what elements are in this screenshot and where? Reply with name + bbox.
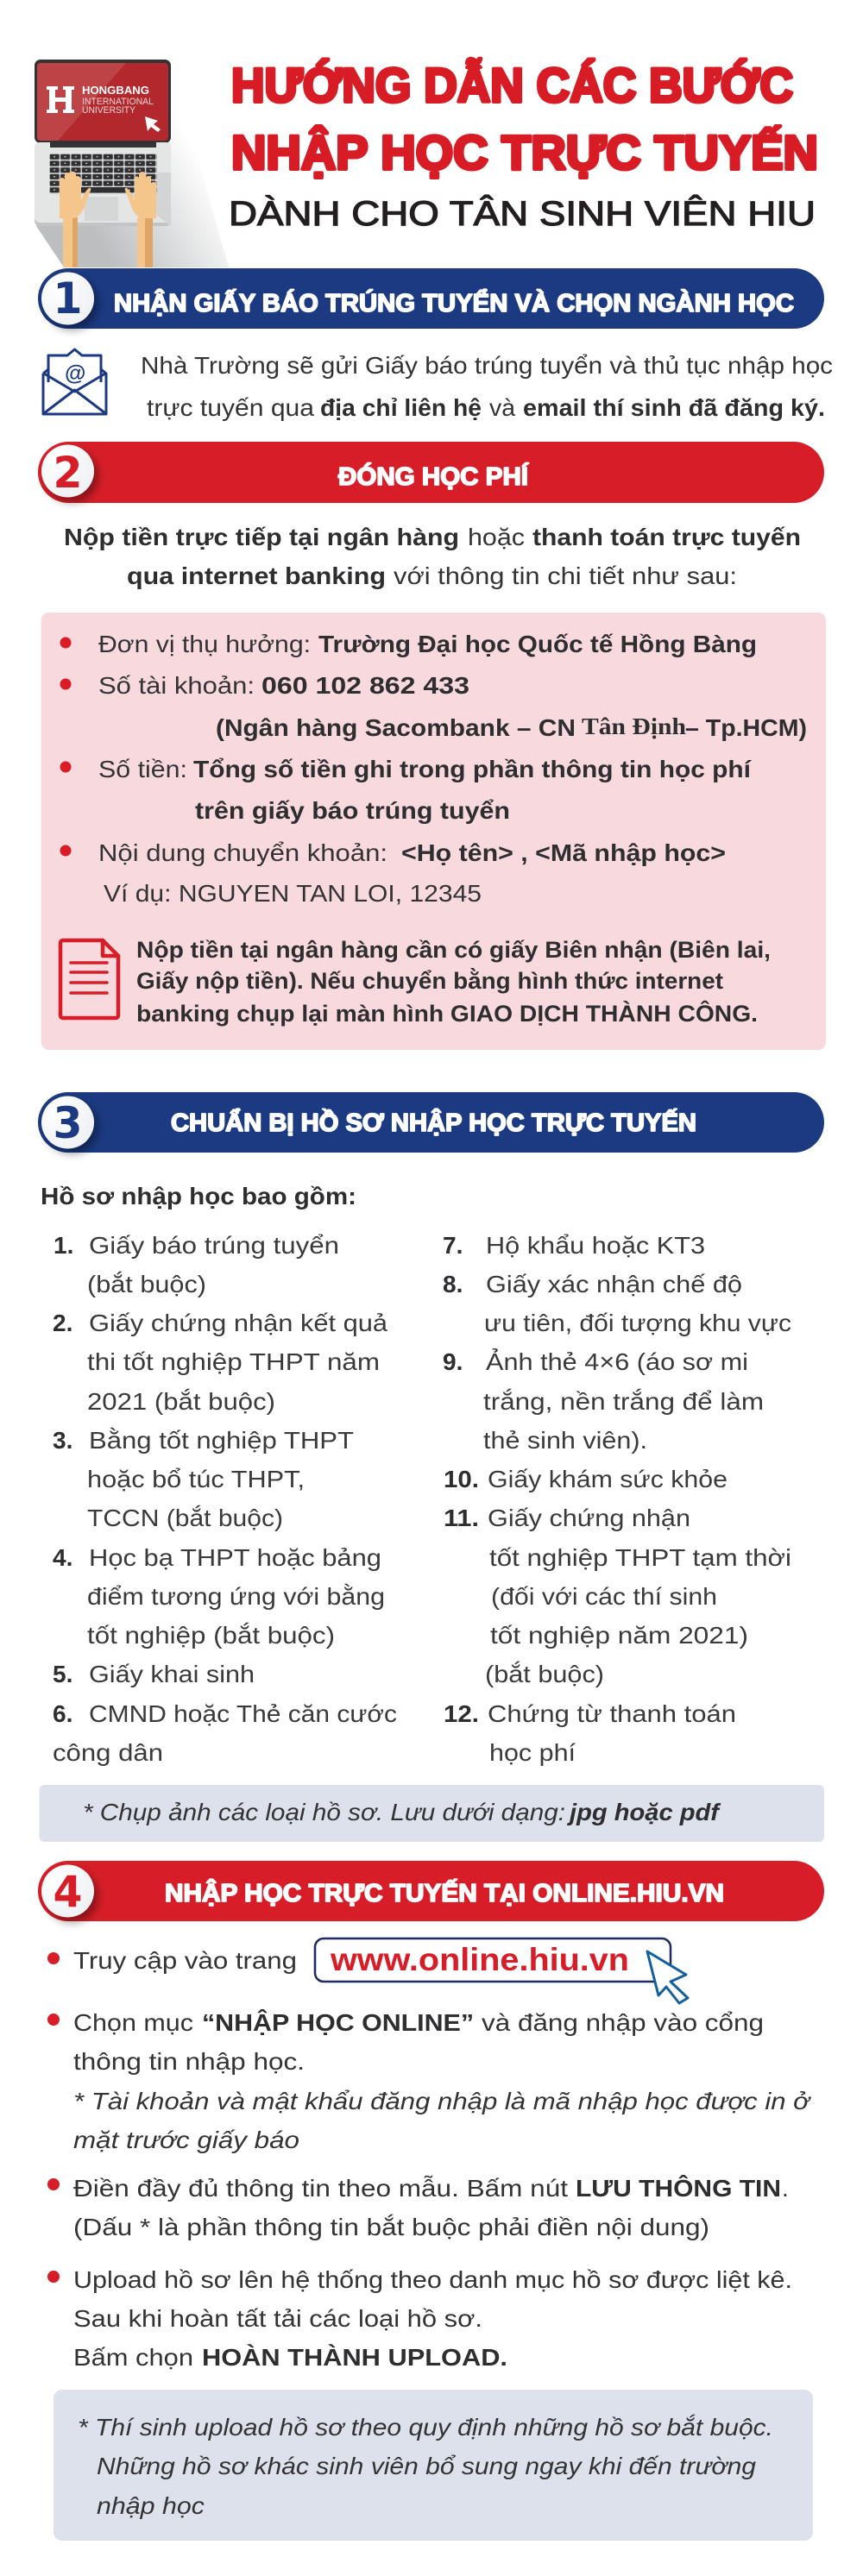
list: right column: Giấy xác nhận chế độ	[486, 1271, 742, 1297]
icon: laptop with hands: HONGBANG	[82, 85, 149, 97]
bullet: amount: trên giấy báo trúng tuyển	[195, 797, 510, 824]
list: right column: Giấy chứng nhận	[488, 1505, 690, 1531]
list: right column: 11.	[444, 1505, 479, 1531]
note: Nộp tiền tại ngân hàng cần có giấy Biên nhận (Biên lai,	[136, 937, 771, 963]
icon: laptop with hands: UNIVERSITY	[82, 105, 136, 116]
list: right column: tốt nghiệp năm 2021)	[490, 1622, 748, 1649]
section 1 text	[141, 352, 833, 421]
list: left column: (bắt buộc)	[87, 1271, 206, 1297]
bullet: beneficiary	[60, 631, 757, 657]
list: left column: Bằng tốt nghiệp THPT	[89, 1427, 354, 1454]
list: left column: 2.	[53, 1310, 72, 1336]
list: left column: tốt nghiệp (bắt buộc)	[87, 1622, 335, 1649]
section 2 intro text: thanh toán trực tuyến	[532, 524, 801, 550]
section 1 text: Nhà Trường sẽ gửi Giấy báo trúng tuyển và thủ tục nhập học	[141, 352, 833, 379]
section 2 intro text: Nộp tiền trực tiếp tại ngân hàng	[64, 524, 459, 550]
step: login: mặt trước giấy báo	[73, 2127, 299, 2153]
list: right column: ưu tiên, đối tượng khu vực	[484, 1310, 791, 1336]
bullet: transfer content: <Họ tên> , <Mã nhập học>	[401, 839, 726, 866]
number badge 3	[41, 1096, 94, 1149]
list: right column: Giấy khám sức khỏe	[488, 1466, 728, 1492]
step: upload: HOÀN THÀNH UPLOAD.	[202, 2344, 507, 2371]
number badge 2	[41, 445, 94, 498]
step: fill form: .	[782, 2175, 789, 2202]
title: HƯỚNG DẪN CÁC BƯỚC	[231, 58, 793, 112]
section 4 header: NHẬP HỌC TRỰC TUYẾN TẠI ONLINE.HIU.VN	[165, 1880, 724, 1907]
callout: file format note: * Chụp ảnh các loại hồ sơ. Lưu dưới dạng:	[83, 1799, 565, 1825]
list: left column: 5.	[53, 1661, 72, 1687]
list: left column: 3.	[53, 1427, 72, 1454]
step: visit site: Truy cập vào trang	[73, 1947, 297, 1974]
step: upload: Bấm chọn	[73, 2344, 193, 2371]
section 2 intro text: hoặc	[468, 524, 525, 550]
bullet: account number: (Ngân hàng Sacombank – CN	[216, 714, 576, 741]
bullet: transfer content	[60, 839, 726, 907]
bullet: beneficiary: Đơn vị thụ hưởng:	[98, 631, 311, 657]
step: login: * Tài khoản và mật khẩu đăng nhập là mã nhập học được in ở	[73, 2088, 811, 2114]
callout: upload note: Những hồ sơ khác sinh viên bổ sung ngay khi đến trường	[97, 2453, 756, 2479]
section 1 text: và	[489, 394, 515, 421]
list: left column: TCCN (bắt buộc)	[87, 1505, 283, 1531]
list: right column: Ảnh thẻ 4×6 (áo sơ mi	[486, 1348, 748, 1375]
bullet: amount: Tổng số tiền ghi trong phần thông tin học phí	[193, 756, 752, 782]
list: left column: hoặc bổ túc THPT,	[87, 1466, 305, 1492]
bullet: transfer content: Ví dụ: NGUYEN TAN LOI, 12345	[104, 880, 482, 907]
section 2 intro text: với thông tin chi tiết như sau:	[394, 562, 737, 589]
callout: upload note: * Thí sinh upload hồ sơ theo quy định những hồ sơ bắt buộc.	[78, 2414, 773, 2441]
section 3 header	[38, 1092, 824, 1153]
step: fill form	[47, 2174, 789, 2240]
note: banking chụp lại màn hình GIAO DỊCH THÀNH CÔNG.	[136, 1001, 758, 1027]
list: right column: Chứng từ thanh toán	[488, 1700, 736, 1727]
step: login: “NHẬP HỌC ONLINE”	[202, 2009, 474, 2036]
url box	[315, 1938, 671, 1982]
number badge 4: 4	[54, 1867, 83, 1917]
title	[231, 58, 818, 179]
list: right column: 12.	[444, 1700, 479, 1727]
section 2 header: ĐÓNG HỌC PHÍ	[338, 463, 529, 491]
section 1 text: địa chỉ liên hệ	[320, 394, 482, 421]
step: upload: Sau khi hoàn tất tải các loại hồ sơ.	[73, 2305, 482, 2332]
number badge 1	[41, 273, 94, 324]
number badge 1: 1	[54, 273, 83, 324]
list: right column	[443, 1232, 791, 1766]
number badge 3: 3	[54, 1098, 83, 1148]
step: login: thông tin nhập học.	[73, 2048, 305, 2075]
icon: laptop with hands: INTERNATIONAL	[82, 97, 154, 107]
icon: envelope: @	[65, 361, 85, 386]
panel: payment details	[41, 613, 826, 1050]
list: left column: Giấy báo trúng tuyển	[89, 1232, 339, 1259]
list: right column: thẻ sinh viên).	[483, 1427, 647, 1454]
step: login: Chọn mục	[73, 2009, 193, 2036]
section 2 header	[38, 442, 824, 503]
step: fill form: LƯU THÔNG TIN	[576, 2174, 781, 2202]
callout: upload note: nhập học	[97, 2492, 205, 2519]
list: left column: 2021 (bắt buộc)	[87, 1388, 275, 1415]
bullet: account number: Tân Định	[582, 713, 686, 739]
icon: document	[60, 940, 118, 1018]
list: left column: 4.	[53, 1544, 72, 1571]
list: right column: trắng, nền trắng để làm	[483, 1388, 764, 1415]
callout: file format note	[40, 1785, 824, 1842]
list: right column: (bắt buộc)	[485, 1661, 604, 1687]
title: NHẬP HỌC TRỰC TUYẾN	[231, 125, 818, 179]
list: left column: 1.	[54, 1232, 73, 1259]
list: left column	[53, 1232, 397, 1766]
list: right column: học phí	[489, 1739, 576, 1766]
step: upload	[47, 2266, 792, 2371]
section 1 header	[38, 268, 824, 329]
list: left column: thi tốt nghiệp THPT năm	[87, 1348, 380, 1375]
section 2 intro text	[64, 524, 801, 589]
subtitle: DÀNH CHO TÂN SINH VIÊN HIU	[229, 194, 816, 233]
note: Giấy nộp tiền). Nếu chuyển bằng hình thức internet	[136, 968, 723, 994]
list: left column: 6.	[53, 1700, 72, 1727]
bullet: account number	[60, 672, 807, 741]
list: left column: Học bạ THPT hoặc bảng	[89, 1544, 381, 1571]
list: left column: điểm tương ứng với bằng	[87, 1583, 385, 1610]
list: right column: 9.	[443, 1348, 463, 1375]
icon: cursor	[647, 1951, 688, 2003]
list: right column: 7.	[443, 1232, 463, 1259]
step: upload: Upload hồ sơ lên hệ thống theo danh mục hồ sơ được liệt kê.	[73, 2266, 792, 2293]
bullet: amount	[60, 756, 752, 824]
list: right column: Hộ khẩu hoặc KT3	[486, 1232, 705, 1259]
list: right column: (đối với các thí sinh	[491, 1583, 717, 1610]
url box: www.online.hiu.vn	[330, 1942, 629, 1977]
step: fill form: Điền đầy đủ thông tin theo mẫu. Bấm nút	[73, 2175, 568, 2202]
section 1 text: trực tuyến qua	[147, 394, 314, 421]
list: right column: 8.	[443, 1271, 463, 1297]
callout: upload note	[54, 2390, 813, 2541]
list: left column: công dân	[53, 1739, 163, 1766]
list: left column: CMND hoặc Thẻ căn cước	[89, 1700, 397, 1727]
icon: laptop with hands	[35, 60, 229, 267]
section 3 header: CHUẨN BỊ HỒ SƠ NHẬP HỌC TRỰC TUYẾN	[171, 1109, 696, 1137]
note	[136, 937, 771, 1027]
number badge 2: 2	[54, 448, 83, 498]
icon: envelope	[43, 349, 106, 414]
bullet: amount: Số tiền:	[98, 756, 187, 782]
bullet: account number: Số tài khoản:	[98, 672, 255, 699]
section 1 text: email thí sinh đã đăng ký.	[523, 394, 825, 421]
callout: file format note: jpg hoặc pdf	[566, 1799, 721, 1825]
heading: document list: Hồ sơ nhập học bao gồm:	[41, 1183, 356, 1209]
bullet: account number: – Tp.HCM)	[685, 714, 807, 741]
bullet: beneficiary: Trường Đại học Quốc tế Hồng Bàng	[318, 631, 757, 657]
bullet: account number: 060 102 862 433	[261, 672, 469, 699]
step: fill form: (Dấu * là phần thông tin bắt buộc phải điền nội dung)	[73, 2214, 709, 2240]
list: right column: 10.	[444, 1466, 479, 1492]
step: login: và đăng nhập vào cổng	[482, 2009, 764, 2036]
bullet: transfer content: Nội dung chuyển khoản:	[98, 839, 387, 866]
section 4 header	[38, 1861, 824, 1921]
number badge 4	[41, 1865, 94, 1917]
section 2 intro text: qua internet banking	[127, 562, 386, 589]
list: left column: Giấy chứng nhận kết quả	[89, 1310, 387, 1336]
step: visit site	[47, 1938, 688, 2003]
step: login	[47, 2009, 811, 2153]
list: left column: Giấy khai sinh	[89, 1661, 255, 1687]
list: right column: tốt nghiệp THPT tạm thời	[489, 1544, 791, 1571]
section 1 header: NHẬN GIẤY BÁO TRÚNG TUYỂN VÀ CHỌN NGÀNH HỌC	[114, 290, 794, 317]
